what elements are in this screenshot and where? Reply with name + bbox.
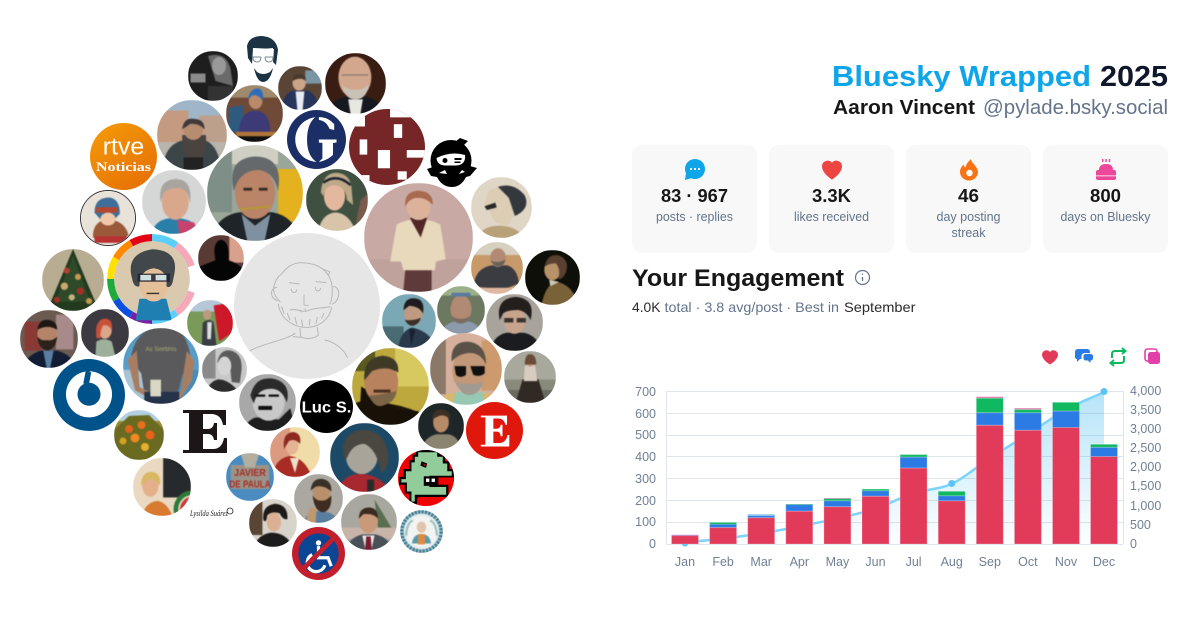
stat card: days on Bluesky: days on Bluesky [1060,210,1151,224]
user name and handle [833,97,1168,119]
heading: Your Engagement: Your Engagement [632,265,844,292]
avatar: vintage child photo [364,183,473,292]
month labels: Nov [1055,555,1078,569]
chart: monthly engagement stacked bars with cumulative line [635,384,1161,569]
avatar: rtve Noticias logo: Noticias [96,160,151,174]
avatar: bearded man with lanyard [382,294,436,348]
avatar: red-haired woman [81,309,129,357]
left axis labels: 200 [635,494,656,508]
stat card: posts and replies: 83 · 967 [661,186,728,206]
avatar: central profile drawing [234,233,380,379]
avatar: The Guardian G logo [287,110,346,169]
icon: reposts arrows [1110,348,1126,366]
stat card: posts and replies [632,145,757,253]
month labels: May [826,555,850,569]
avatar: Luc S. black logo [300,380,352,433]
engagement summary line [632,299,916,315]
stat card: posts and replies: posts · replies [656,210,733,224]
month labels: Aug [941,555,963,569]
left axis labels: 300 [635,472,656,486]
avatar: Groucho Marx photo [239,374,296,431]
month labels: Jan [675,555,695,569]
engagement summary line: 4.0K [632,299,661,315]
avatar: Mozart portrait [525,250,580,305]
avatar: blue ring logo [53,358,125,430]
right axis labels: 1,500 [1130,479,1161,493]
cumulative line [685,392,1104,542]
right axis labels: 3,000 [1130,422,1161,436]
engagement summary line: September [844,299,916,315]
stat card: day posting streak [906,145,1031,253]
avatar: ninja mascot [427,138,477,187]
chart legend icons [1042,348,1160,366]
avatar: pride-ring cartoon portrait [107,234,195,324]
avatar: painted child on blue [330,423,399,492]
left axis labels: 600 [635,407,656,421]
stat card: days on Bluesky [1043,145,1168,253]
avatar: Luc S. black logo: Luc S. [301,399,351,416]
avatar: dark portrait [188,51,238,101]
avatar: man with sunglasses [430,333,502,405]
stat card: likes received [769,145,894,253]
left axis labels [635,385,656,551]
stat card: day posting streak: 46 [958,186,979,206]
month labels: Mar [750,555,772,569]
avatar: man with red tie [341,494,397,550]
right axis labels: 3,500 [1130,403,1161,417]
month labels: Jun [865,555,886,569]
month labels: Jul [906,555,922,569]
line points [682,388,1108,546]
avatar: bearded man outdoors [157,100,227,170]
panel: header and stats [620,50,1180,580]
avatar: curly-haired man with glasses [486,294,543,351]
right axis labels: 2,000 [1130,460,1161,474]
engagement summary line: total · 3.8 avg/post · Best in [664,299,839,315]
user name and handle: Aaron Vincent [833,97,975,119]
month labels: Sep [979,555,1001,569]
title: 2025 [1100,61,1168,93]
right axis labels: 2,500 [1130,441,1161,455]
avatar: man in grey t-shirt [471,242,523,294]
avatar: pixel dinosaur [398,450,454,506]
cumulative area fill [685,392,1104,544]
stat card: days on Bluesky: 800 [1090,186,1121,206]
icon: quotes copy [1145,349,1160,364]
avatar: man with fairy lights [352,348,429,425]
avatar: man with pencil in mouth [207,145,303,241]
icon: replies chat [1075,349,1093,363]
right axis labels: 1,000 [1130,499,1161,513]
avatar: woman with watermelon [133,458,191,516]
right axis labels: 0 [1130,537,1137,551]
avatar: maroon pixel pattern [349,109,425,185]
avatar: black and white woman [202,347,247,392]
avatar: orange tree [114,410,164,460]
left axis labels: 100 [635,515,656,529]
avatar: rtve Noticias logo: rtve [103,133,144,160]
avatar: christmas tree [42,249,104,311]
avatar: man with red flag [187,300,233,346]
avatar: painted man with moustache [471,177,532,238]
avatar: signature logo: Lysilda Suárez [189,509,229,518]
avatar: bald man with glasses [325,53,386,114]
avatar: blue-haired woman [226,85,283,142]
avatar: dark silhouette [198,235,244,281]
title: Bluesky Wrapped [832,61,1091,93]
avatar: man in suit [278,66,322,110]
icon: info [856,270,870,284]
avatar: regency woman portrait [306,169,368,231]
stat card: day posting streak: day posting [936,210,1001,224]
month labels: Oct [1018,555,1038,569]
avatar: Javier de Paula logo: JAVIER [234,468,266,479]
month labels: Apr [790,555,809,569]
month labels: Feb [712,555,734,569]
stat card: day posting streak: streak [952,226,986,240]
avatar: grey-haired woman [142,170,206,234]
avatar: man with sunglasses on head [437,286,485,334]
avatar: round badge logo [400,510,442,552]
left axis labels: 0 [649,537,656,551]
avatar: cartoon man with glasses [247,36,278,82]
avatar: cartoon helmet pilot [80,190,136,246]
avatar: curly dark-haired woman [249,499,297,547]
right axis labels: 500 [1130,518,1151,532]
stacked bars [672,397,1118,544]
avatar: man in grey t-shirt at beach [123,328,199,404]
stat card: likes received: likes received [794,210,869,224]
month labels: Dec [1093,555,1115,569]
avatar: Javier de Paula logo [226,453,274,501]
avatar: rtve Noticias logo [90,123,157,190]
avatar: bearded man in suit [20,310,78,368]
avatar: bearded man thinking [294,474,343,523]
left axis labels: 500 [635,428,656,442]
left axis labels: 400 [635,450,656,464]
right axis labels [1130,384,1161,551]
avatar: red vintage illustration [270,427,320,477]
avatar: man in grey t-shirt at beach: As Seirbhís [145,346,177,353]
right axis labels: 4,000 [1130,384,1161,398]
stat card: likes received: 3.3K [812,186,851,206]
left axis labels: 700 [635,385,656,399]
month labels [675,555,1115,569]
avatar: man in khaki shirt [418,403,464,449]
avatar: crossed disability sign [292,527,345,580]
avatar: red E logo [466,402,523,459]
avatar: black serif E [183,410,227,453]
avatar: woman in dark skirt [504,351,556,403]
panel: avatar bubble cluster [20,36,580,580]
icon: likes heart [1042,350,1058,364]
user name and handle: @pylade.bsky.social [983,97,1168,119]
